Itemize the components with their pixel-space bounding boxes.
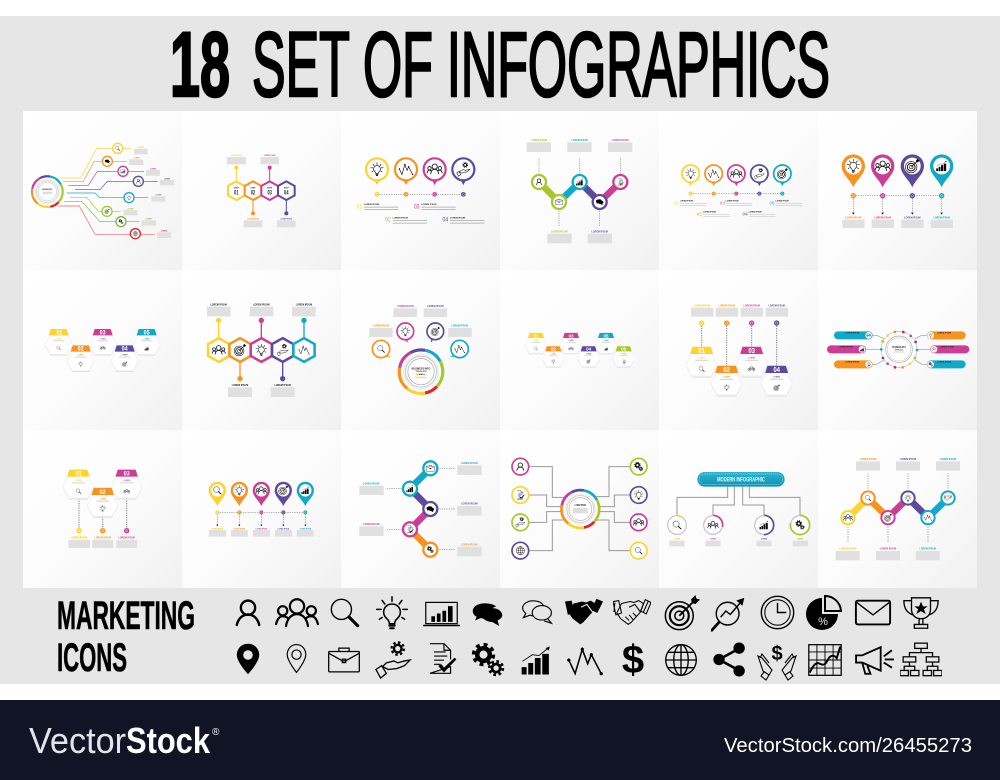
hexagon numbers [76,471,130,496]
hexagon numbers: 01 [56,330,63,336]
numbered captions: 02 [697,212,702,217]
dashed timeline and arrows [851,193,944,215]
hub ring: BUSINESS INFO [892,347,906,349]
text blocks: LOREM IPSUM [880,549,896,551]
icon: gears [474,645,503,675]
text blocks [527,140,632,243]
icon: clock [761,596,794,629]
icon: person [237,601,259,625]
title [170,14,830,116]
numbered captions: 03 [414,203,420,210]
panel: five node wave [500,111,659,270]
center ring [31,176,63,208]
dashed leaders [848,473,948,543]
numbered captions [356,203,448,224]
center ring [398,349,444,394]
icon: dollar: $ [622,638,644,682]
bar captions: LOREM IPSUM [839,346,853,348]
text blocks [691,306,788,317]
circle nodes [668,515,810,535]
icon row 2 [237,638,942,682]
text blocks [227,155,296,227]
text blocks: LOREM IPSUM [571,140,588,142]
panel: four circle pins timeline [341,111,500,270]
hexagon numbers: 05 [603,333,609,339]
text blocks: LOREM IPSUM [839,549,856,551]
icon: rising bars [522,646,550,675]
text blocks: LOREM [161,231,168,233]
header pill [697,472,785,487]
text blocks: LOREM IPSUM [230,155,243,157]
text blocks: LOREM IPSUM [904,217,921,219]
text blocks: LOREM IPSUM [461,504,478,506]
text blocks: LOREM IPSUM [363,483,380,485]
bar captions: LOREM IPSUM [845,361,860,363]
wave nodes [841,491,955,524]
hexagon numbers [234,188,290,197]
caption text [364,204,484,224]
icon: hand with gear [376,642,410,678]
panel: vertical wave [341,430,500,588]
text blocks: LOREM IPSUM [277,528,290,530]
connectors [677,487,800,515]
map pins [209,482,314,506]
center ring: BUSINESS INFO [42,189,53,191]
bar captions [839,332,954,363]
icon: pie chart: % [818,616,828,628]
icon: org chart [900,643,942,676]
icon: outline pin [287,645,306,672]
hub ring [880,331,918,369]
wave links [848,498,948,518]
hexagons with icons [208,338,316,363]
icon: grid chart [809,645,841,675]
hexagon numbers [698,346,781,374]
wave nodes [403,461,437,557]
hexagon numbers: 03 [748,346,755,355]
vectorstock logo: Vector [29,720,126,761]
hexagon numbers: 04 [284,191,289,197]
dashed leaders [387,468,455,550]
text blocks: LOREM IPSUM [551,231,568,233]
icon: briefcase [329,648,359,672]
caption text: LOREM IPSUM [364,204,379,206]
numbered captions: 05 [769,201,775,206]
bar captions: LOREM IPSUM [940,346,954,348]
text blocks: LOREM IPSUM [94,538,111,540]
text blocks [209,528,314,537]
hexagon cards [525,333,635,368]
bar captions: LOREM IPSUM [937,332,951,334]
icon row 1 [237,595,938,630]
text blocks [836,459,960,560]
icon: share [713,642,745,677]
panel: ring with speech bubbles [341,270,500,430]
dashed leaders [539,158,620,227]
numbered captions: LOREM IPSUM [749,212,762,214]
hexagon numbers: STEP [267,188,273,190]
marketing icons heading: MARKETING [57,594,195,638]
text blocks: LOREM [797,539,804,541]
numbered captions: LOREM IPSUM [776,201,789,203]
dashed leaders [702,326,777,366]
marketing icons heading [57,594,195,680]
center ring: TEMPLATE [415,370,427,373]
hexagon numbers: 04 [586,347,591,353]
text blocks [842,217,953,228]
icon: target [665,595,700,630]
text blocks: LOREM IPSUM [768,306,785,308]
dashed timeline [689,192,784,196]
panel: hub with eight nodes [500,430,659,588]
dashed timeline and arrows [215,510,307,526]
icon: zigzag [567,648,603,675]
text blocks: LOREM IPSUM [296,304,312,306]
title: 18 [170,14,230,116]
hexagon numbers: 01 [698,346,705,355]
text blocks: LOREM IPSUM [933,217,950,219]
text blocks: LOREM IPSUM [233,528,246,530]
text blocks [123,147,174,238]
text blocks [369,306,472,337]
text blocks: LOREM [146,219,152,221]
numbered captions: LOREM IPSUM [726,201,739,203]
text blocks [207,304,316,397]
numbered captions: 02 [385,217,391,224]
bar captions: LOREM IPSUM [937,361,951,363]
text blocks: LOREM IPSUM [461,544,478,546]
text blocks: LOREM [127,208,134,210]
icon: handshake solid [565,599,603,624]
panel: hub with colored bars [818,270,977,430]
hexagon numbers: 01 [76,471,82,478]
icon: search [331,599,358,626]
hexagon numbers: 02 [78,347,84,353]
icon: magnifier arrow [712,598,744,630]
caption text: LOREM IPSUM [393,217,408,219]
hexagon numbers: 02 [100,489,106,496]
text blocks: LOREM [155,195,162,197]
text blocks: LOREM IPSUM [363,524,380,526]
wave links [539,182,620,202]
icon: group [276,599,318,626]
hexagon numbers: STEP [234,188,240,190]
hexagon numbers: 03 [568,333,574,339]
dashed leaders [79,498,127,528]
marketing icons heading: ICONS [57,636,127,680]
icon nodes [102,143,143,239]
panel: four step hexagons [182,111,341,270]
text blocks: LOREM IPSUM [373,325,389,327]
icon: mail [856,601,890,624]
hexagon numbers: 02 [723,365,730,374]
numbered captions: 04 [442,217,448,224]
text blocks [359,463,482,556]
colored bars [827,331,969,368]
text blocks: LOREM IPSUM [451,325,468,327]
text blocks [68,538,137,548]
text blocks: LOREM IPSUM [210,304,227,306]
text blocks: LOREM IPSUM [247,218,259,220]
panel: six paper hexagons [500,270,659,430]
text blocks: LOREM IPSUM [612,140,629,142]
center ring: BUSINESS INFO [412,366,431,370]
text blocks: LOREM IPSUM [718,306,735,308]
numbered captions [674,201,802,217]
hexagon numbers: STEP [250,188,256,190]
connector stems [234,166,288,215]
node icons [105,146,140,236]
text blocks: LOREM [164,178,171,180]
hexagon numbers: 06 [621,347,626,353]
hub ring: TEMPLATE [895,348,904,351]
text blocks: LOREM IPSUM [71,538,87,540]
text blocks: LOREM IPSUM [531,140,547,142]
text blocks: LOREM IPSUM [900,459,916,461]
hexagon numbers [56,330,150,353]
hexagon numbers: 05 [144,330,150,336]
vectorstock logo: Stock [126,720,211,761]
text blocks: LOREM [710,539,717,541]
panel: five circle pins timeline [659,111,818,270]
text blocks: LOREM IPSUM [274,385,291,387]
connectors [529,467,630,551]
icon: chat outline [523,601,551,623]
icon: globe [666,645,696,675]
text blocks: LOREM IPSUM [299,528,312,530]
footer bar [0,700,1000,780]
caption text: LOREM IPSUM [450,217,465,219]
text blocks: LOREM IPSUM [919,549,936,551]
branch lines [58,148,158,234]
text blocks: LOREM [761,539,768,541]
icon: laptop chart [423,602,460,626]
text blocks: LOREM IPSUM [694,306,710,308]
hexagon numbers: 04 [773,365,781,374]
hexagon numbers: STEP [284,188,290,190]
panel: five map pins [182,430,341,588]
icon: pie chart [806,596,841,630]
header pill: MODERN INFOGRAPHIC [717,477,765,484]
hexagon numbers: 04 [122,347,128,353]
hub ring: LOREM IPSUM [575,505,586,507]
text blocks [669,539,808,546]
hexagon numbers: 03 [124,471,130,478]
panel: hexagon cards with stems [23,430,182,588]
icon: megaphone [856,647,894,674]
hexagon numbers: 01 [234,191,239,197]
text blocks: LOREM IPSUM [118,538,135,540]
text blocks: LOREM IPSUM [397,306,414,308]
pins [682,165,791,186]
numbered captions: 01 [674,201,680,206]
icon: trophy [904,598,938,628]
text blocks: LOREM IPSUM [461,463,478,465]
panel: six node wave [818,430,977,588]
icon: hands with dollar [758,643,796,680]
text blocks: LOREM IPSUM [211,528,224,530]
text blocks: LOREM IPSUM [940,459,956,461]
text blocks: LOREM IPSUM [874,217,891,219]
text blocks: LOREM [674,539,681,541]
text blocks: LOREM [134,158,140,160]
icon: bulb [377,597,407,628]
markers [76,528,129,533]
pins [366,158,474,185]
text blocks: LOREM IPSUM [743,306,760,308]
vectorstock logo [29,720,220,761]
text blocks: LOREM IPSUM [427,306,444,308]
numbered captions: 03 [720,201,725,206]
numbered captions: 01 [356,203,362,210]
connectors [866,335,937,364]
text blocks: LOREM IPSUM [264,155,276,157]
numbered captions: LOREM IPSUM [680,201,693,203]
caption text: LOREM IPSUM [421,204,437,206]
text blocks: LOREM IPSUM [280,218,293,220]
hexagon numbers: 02 [251,191,256,197]
dashed timeline [375,192,466,197]
icon: hands with dollar: $ [771,643,783,665]
stems [216,318,307,381]
bar captions: LOREM IPSUM [845,332,860,334]
panel: radial branching lines [23,111,182,270]
hexagon cards [45,329,161,372]
vectorstock logo: ® [212,727,220,738]
numbered captions: LOREM IPSUM [703,212,716,214]
hexagon cards [686,347,793,396]
text blocks: LOREM IPSUM [591,231,608,233]
icon nodes [512,458,647,559]
wave links [410,468,430,550]
hexagon numbers: 02 [551,347,556,353]
panel: modern infographic tree [659,430,818,588]
panel: hanging hexagons [659,270,818,430]
text blocks: LOREM [138,147,144,149]
icon: chat solid [473,603,502,626]
hexagon numbers: 03 [267,191,272,197]
hexagon numbers [533,333,626,353]
text blocks: LOREM IPSUM [232,385,248,387]
panel: four large map pins [818,111,977,270]
text blocks: LOREM IPSUM [253,304,270,306]
icon: document check [430,644,456,673]
panel: five paper hexagons [23,270,182,430]
top markers [699,320,779,326]
hexagon numbers: 01 [533,333,539,339]
icon: solid pin [237,644,259,674]
text blocks: LOREM IPSUM [255,528,268,530]
text blocks: LOREM IPSUM [860,459,876,461]
text blocks: LOREM [150,168,157,170]
icon: handshake outline [613,600,651,624]
numbered captions: 04 [742,212,748,217]
speech bubbles [372,323,468,358]
hexagons [228,181,296,201]
panel: five icon hexagons with stems [182,270,341,430]
wave nodes [532,175,627,209]
map pins [842,154,953,187]
text blocks: LOREM IPSUM [845,217,862,219]
image id: VectorStock.com/26455273 [724,735,972,757]
hexagon cards [63,470,142,518]
hexagon numbers: 03 [100,330,106,336]
